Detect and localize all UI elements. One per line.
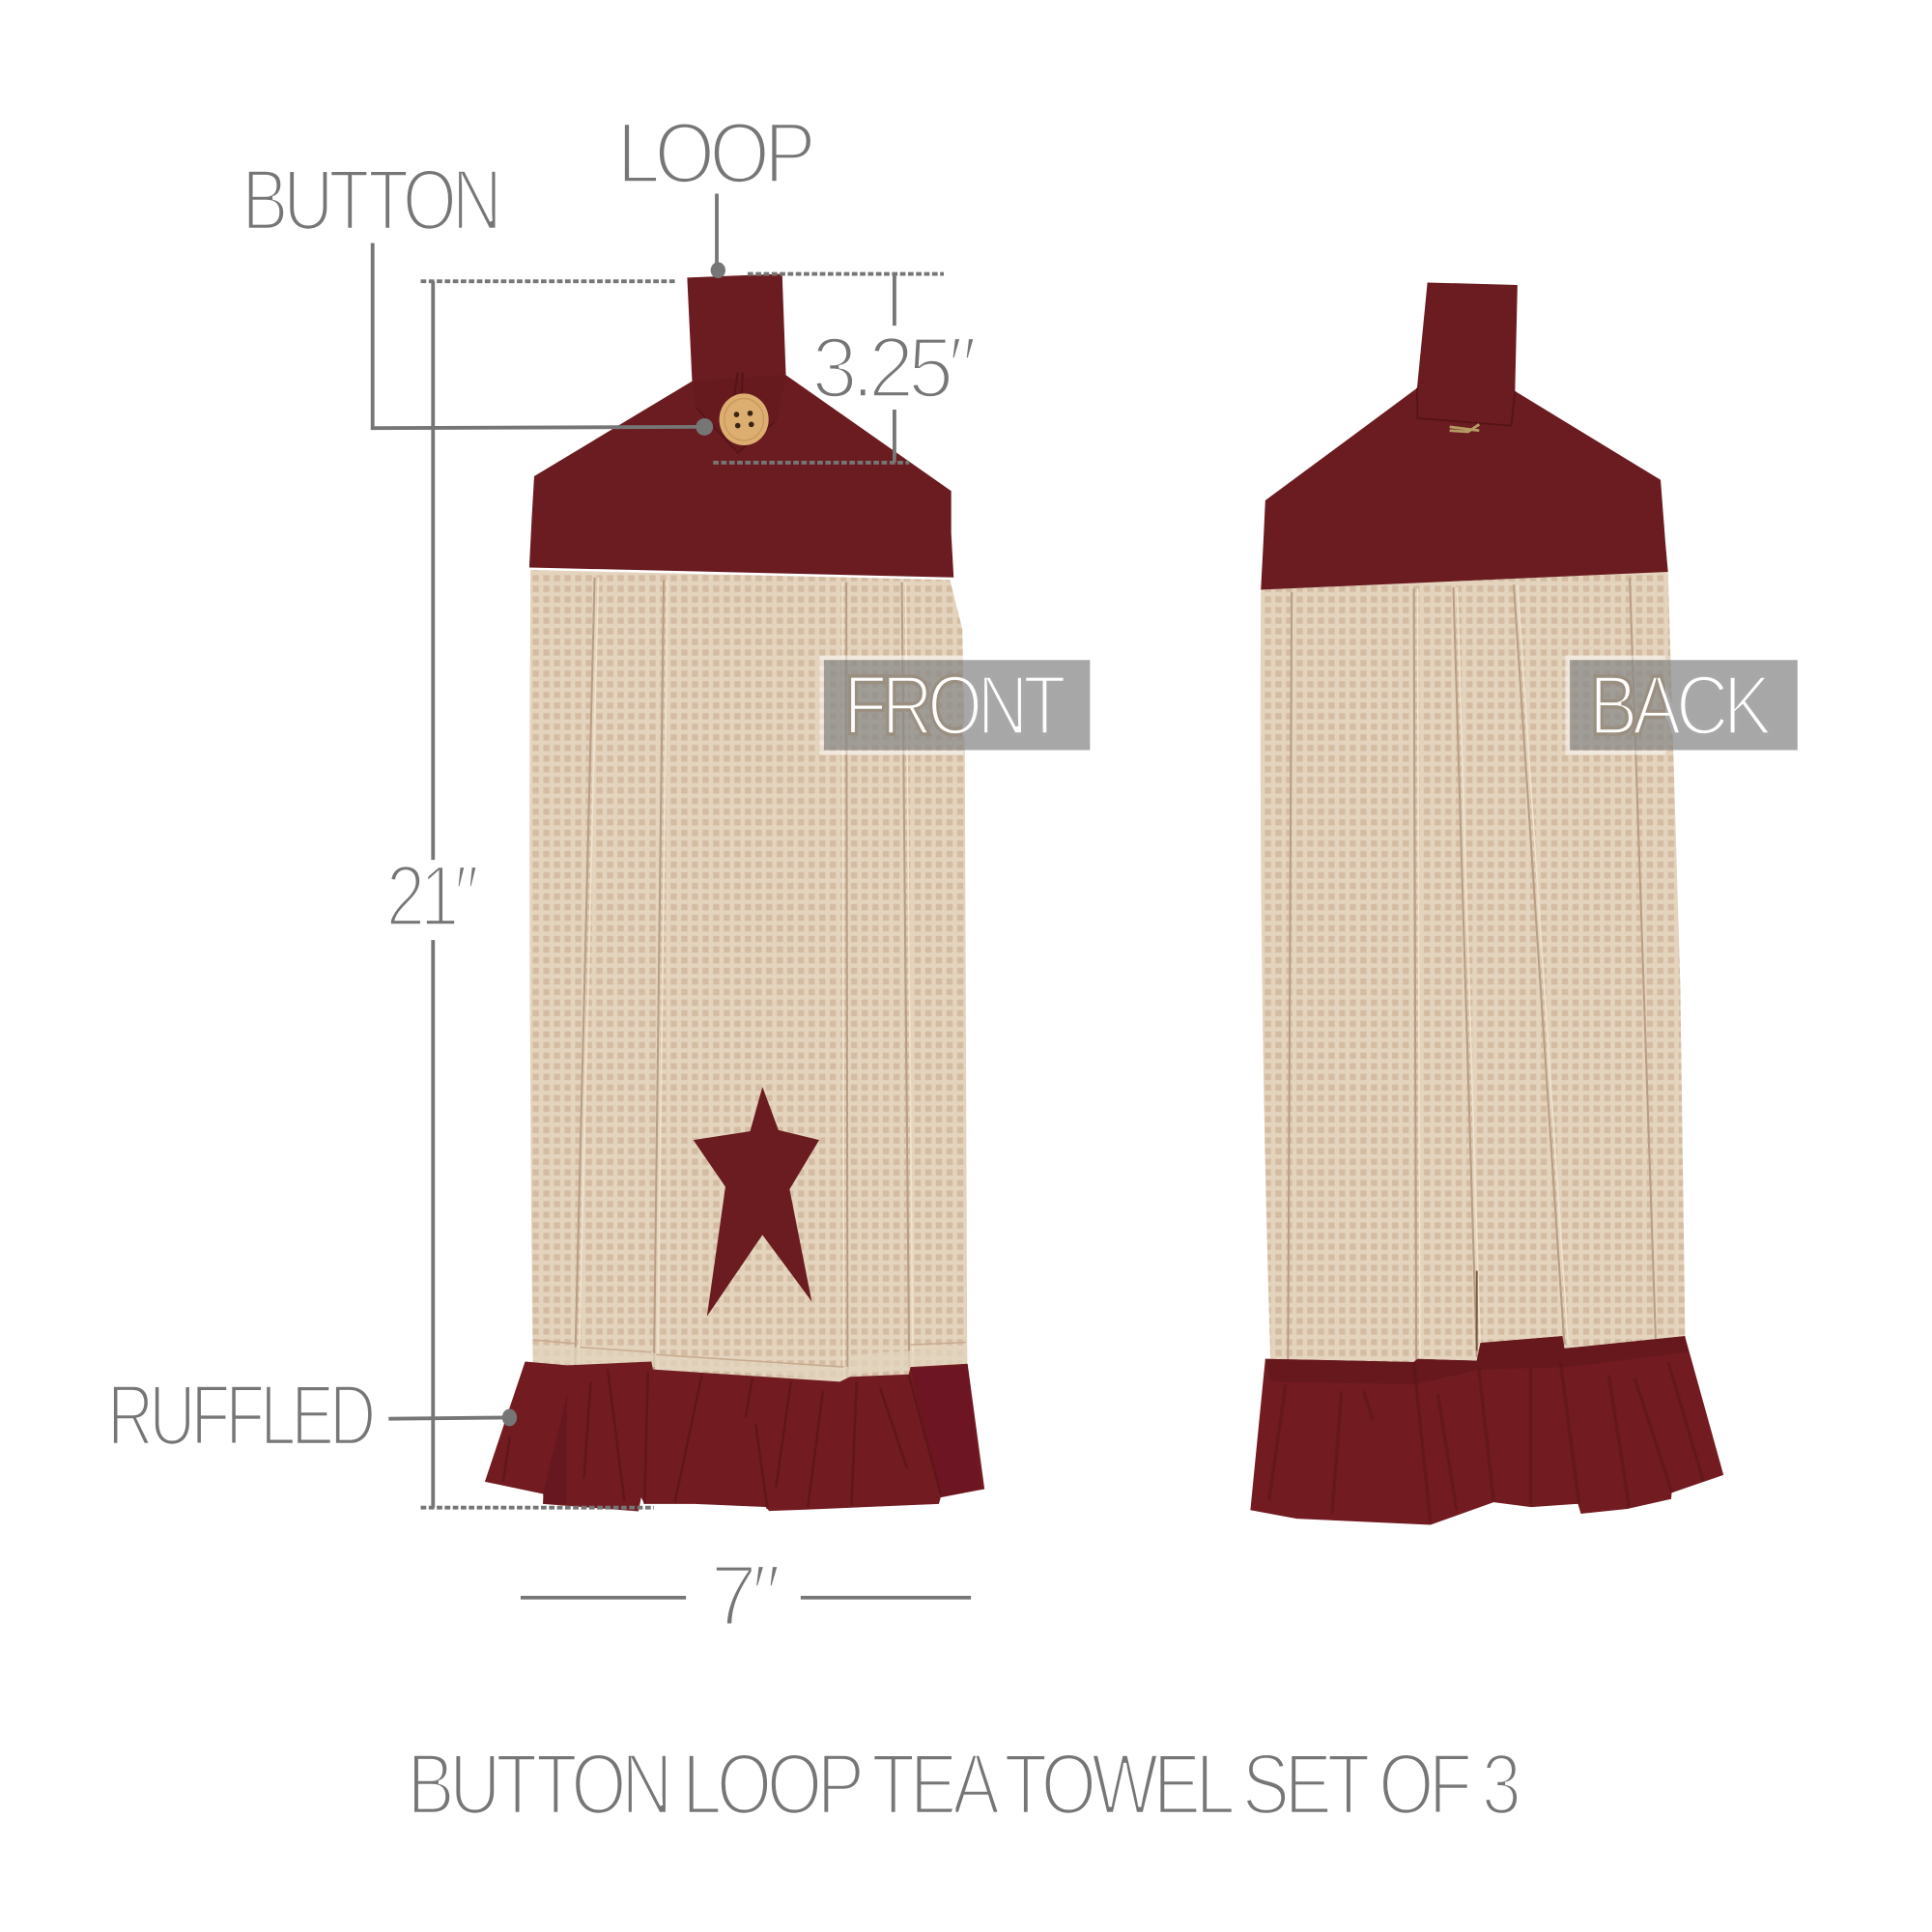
- front header and loop: [529, 274, 953, 578]
- back tag: BACK: [1589, 659, 1772, 753]
- primitive star: [694, 1087, 819, 1317]
- back loop stitching and twine: [1417, 388, 1515, 432]
- dimension: 21 inch height: 21″: [386, 847, 477, 944]
- label: ruffled: RUFFLED: [107, 1367, 374, 1463]
- dimension: 7 inch width: 7″: [711, 1547, 780, 1643]
- back towel: [1250, 282, 1723, 1525]
- front ruffle: [485, 1361, 984, 1511]
- label: loop: LOOP: [617, 104, 812, 201]
- front tag: FRONT: [844, 659, 1065, 753]
- back pleats: [1288, 578, 1656, 1365]
- title: BUTTON LOOP TEA TOWEL SET OF 3: [407, 1735, 1519, 1832]
- back ruffle: [1250, 1336, 1723, 1525]
- dimension: 3.25 inch loop: 3.25″: [811, 319, 976, 415]
- label: button: BUTTON: [242, 152, 497, 248]
- label: loop: [617, 104, 812, 278]
- back waffle body: [1261, 571, 1686, 1372]
- button flap: [694, 373, 786, 453]
- front towel: [485, 274, 984, 1511]
- back header and loop: [1261, 282, 1668, 589]
- front pleats: [533, 578, 967, 1379]
- front waffle body: [529, 570, 967, 1388]
- wooden button: [720, 393, 769, 445]
- label: button: [242, 152, 713, 436]
